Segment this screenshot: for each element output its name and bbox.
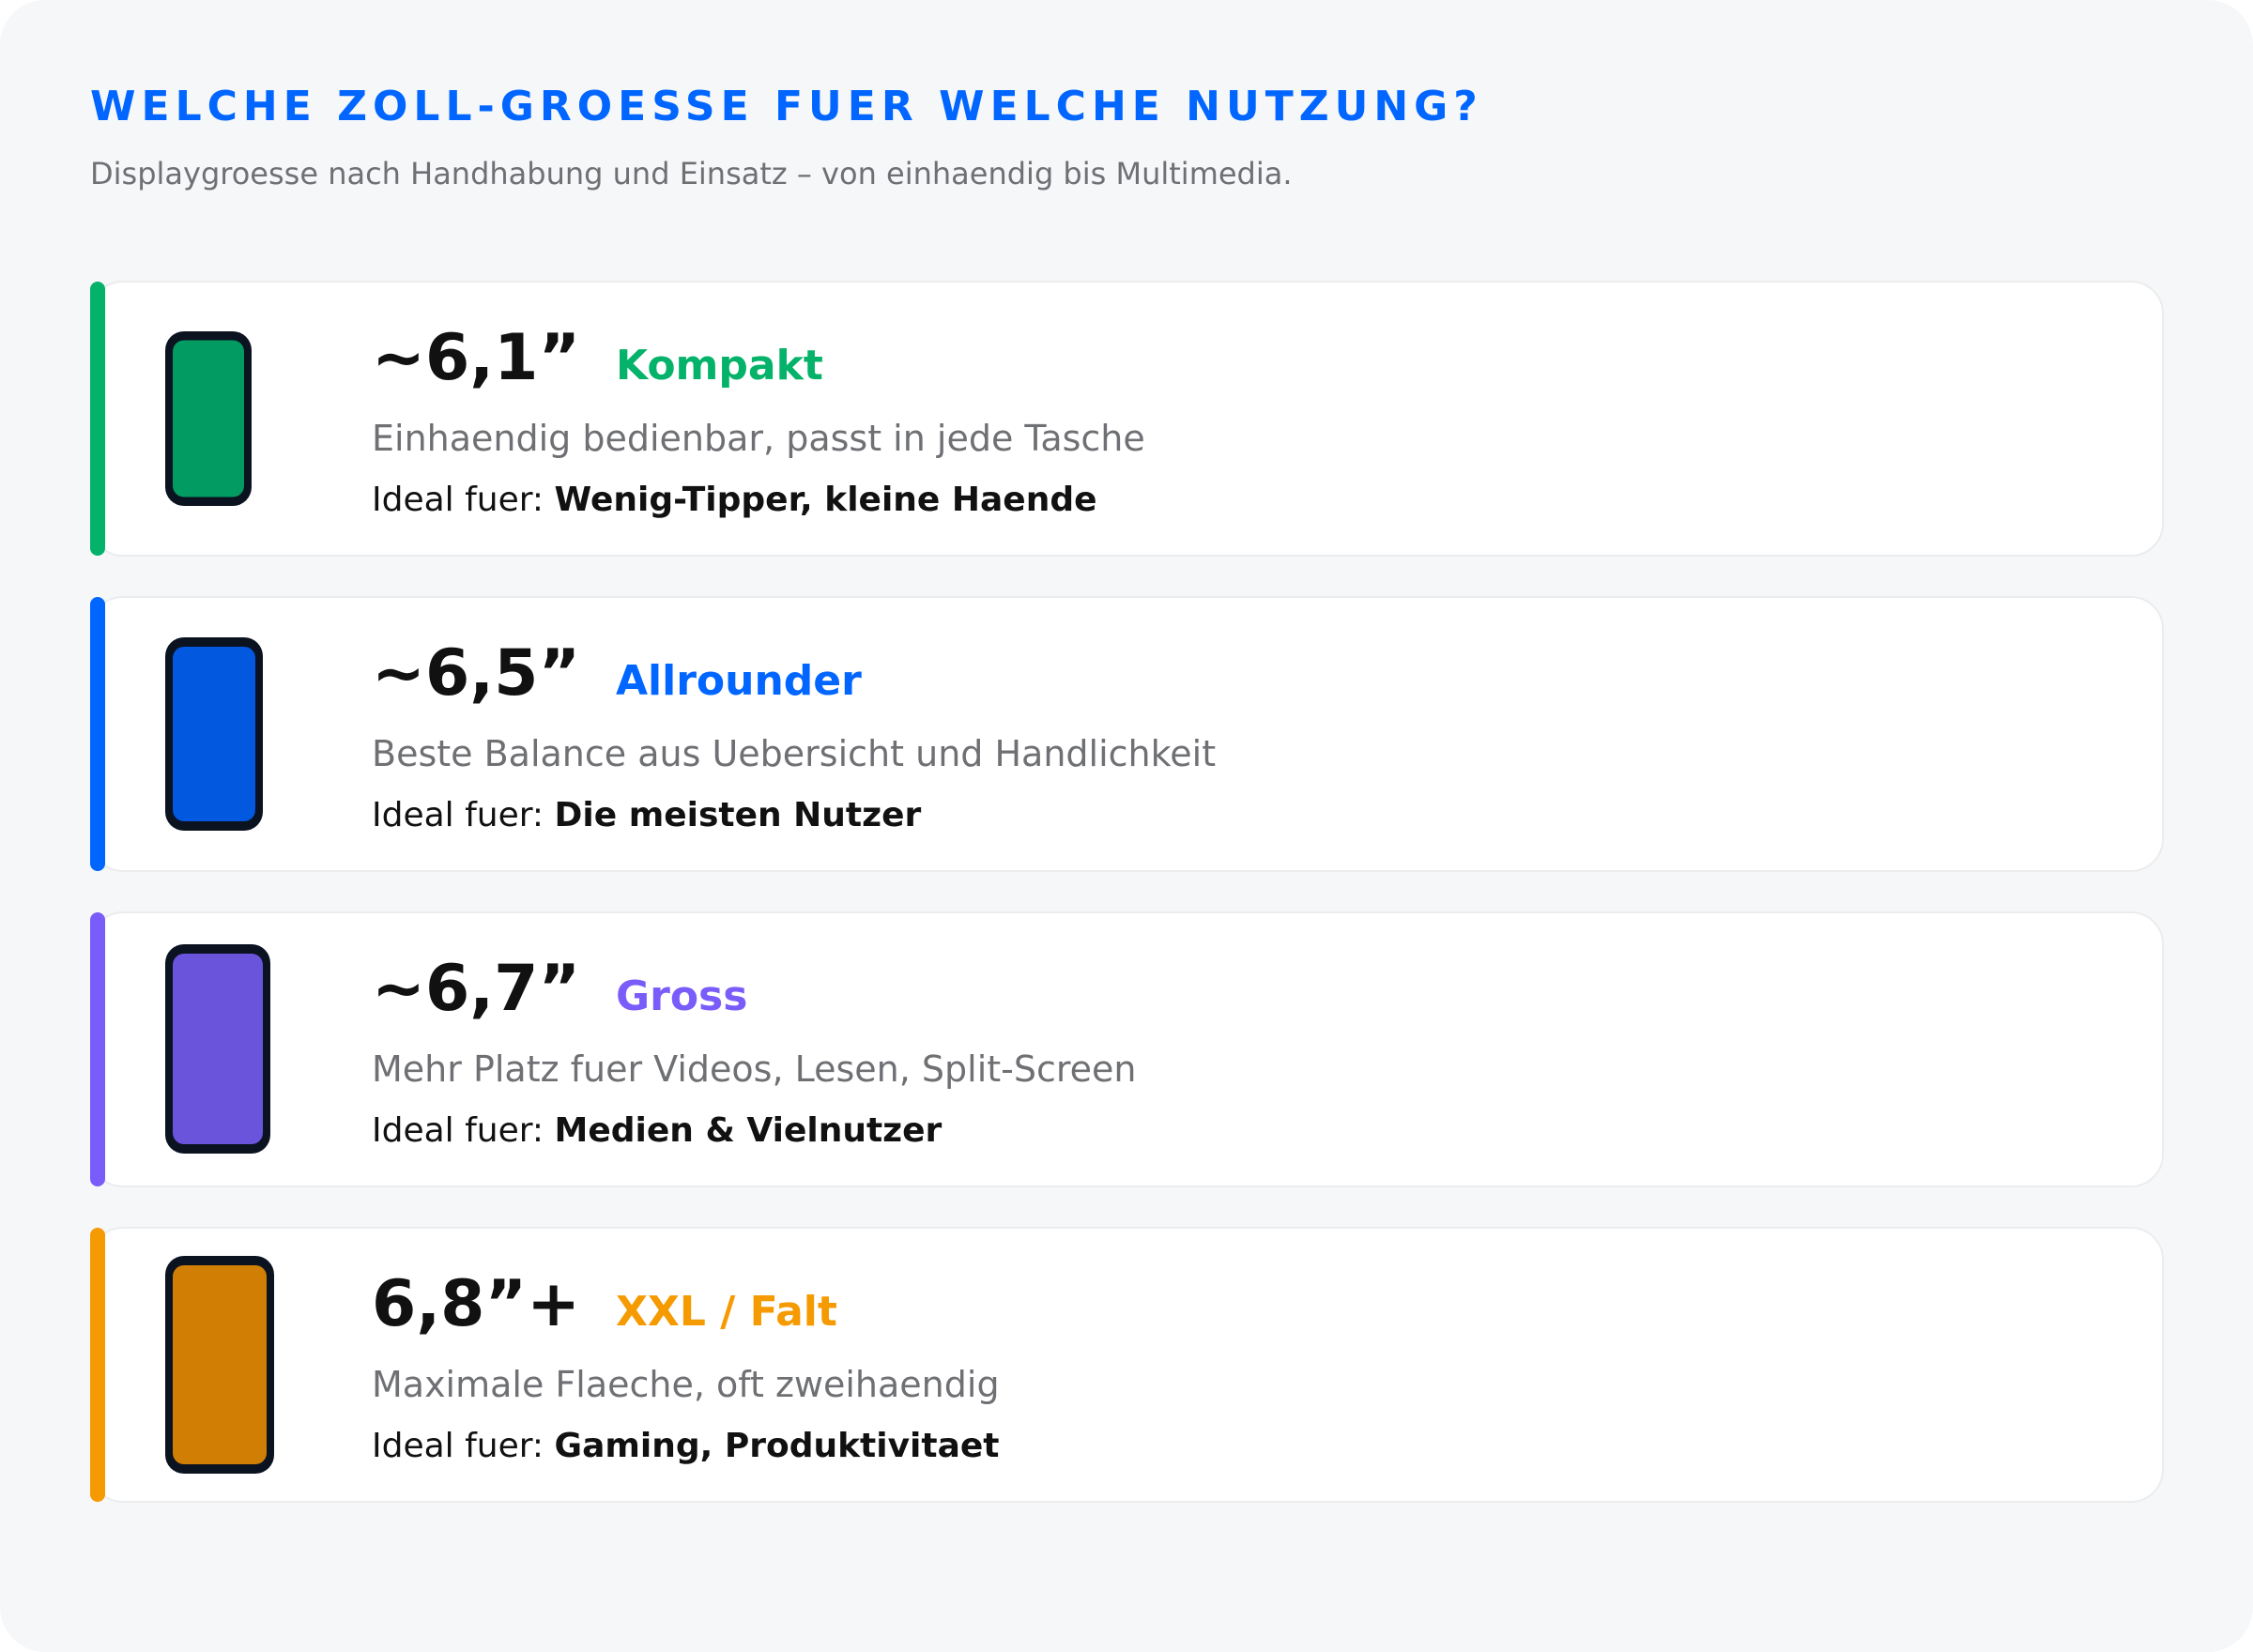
icon: medium phone bbox=[165, 637, 263, 831]
tag: Allrounder: Allrounder bbox=[616, 657, 862, 705]
size: ~6,1: ~6,1” bbox=[372, 321, 580, 395]
icon: XXL phone bbox=[165, 1256, 274, 1474]
ideal use: Ideal fuer: Gaming, Produktivitaet bbox=[372, 1427, 1000, 1465]
icon: compact phone bbox=[165, 331, 252, 506]
ideal use: Ideal fuer: Die meisten Nutzer bbox=[372, 796, 922, 834]
tag: Gross: Gross bbox=[616, 972, 747, 1020]
size: ~6,5: ~6,5” bbox=[372, 636, 580, 711]
panel: 6,1 Kompakt bbox=[90, 282, 2163, 556]
icon: large phone bbox=[165, 944, 270, 1154]
panel: 6,7 Gross bbox=[90, 912, 2163, 1186]
title: WELCHE ZOLL-GROESSE FUER WELCHE NUTZUNG? bbox=[90, 83, 1483, 130]
size: ~6,7: ~6,7” bbox=[372, 952, 580, 1026]
description: Maximale Flaeche, oft zweihaendig bbox=[372, 1364, 1000, 1405]
panel: 6,5 Allrounder bbox=[90, 597, 2163, 871]
panel: 6,8+ XXL / Falt bbox=[90, 1228, 2163, 1502]
ideal use: Ideal fuer: Medien & Vielnutzer bbox=[372, 1111, 943, 1150]
tag: XXL / Falt: XXL / Falt bbox=[616, 1288, 837, 1336]
size: 6,8+: 6,8”+ bbox=[372, 1267, 580, 1341]
subtitle: Displaygroesse nach Handhabung und Einsatz – von einhaendig bis Multimedia. bbox=[90, 156, 1293, 191]
tag: Kompakt: Kompakt bbox=[616, 342, 823, 390]
ideal use: Ideal fuer: Wenig-Tipper, kleine Haende bbox=[372, 481, 1097, 519]
description: Einhaendig bedienbar, passt in jede Tasche bbox=[372, 418, 1145, 459]
description: Beste Balance aus Uebersicht und Handlichkeit bbox=[372, 733, 1216, 774]
description: Mehr Platz fuer Videos, Lesen, Split-Screen bbox=[372, 1048, 1137, 1090]
